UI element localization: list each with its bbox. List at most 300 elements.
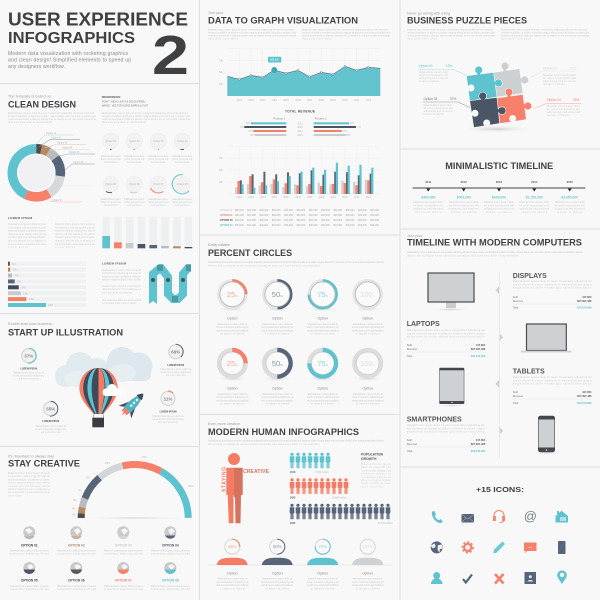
illustration: rocket bbox=[115, 387, 150, 422]
block: tablets: $27,097,486 bbox=[577, 394, 592, 398]
text block: data intro bbox=[208, 28, 391, 40]
percent circle labels row two: sed do eiusmod tempor incididunt bbox=[261, 398, 294, 402]
big numeral 2: 2 bbox=[152, 24, 189, 86]
block: tablets: 447,804 bbox=[582, 390, 592, 394]
illustration: hot air balloon bbox=[79, 368, 118, 427]
callout: option 03: 37% bbox=[450, 97, 457, 101]
timeline values: $700,000 bbox=[457, 196, 471, 200]
callout: option 02: Material lorem ipsum dolor bbox=[543, 73, 576, 77]
horizontal bar chart: 4% bbox=[15, 275, 19, 278]
resources list: FONT : NEXA LIGHT & BOLD (FREE) bbox=[102, 100, 145, 104]
block: tablets: $30,079,869 bbox=[577, 401, 592, 405]
block: tablets: sed do eiusmod tempor incididunt ut labore et dolore magna bbox=[513, 378, 592, 382]
block: laptops: Material lorem ipsum dolor sit amet, consectetur adipiscing elit bbox=[407, 328, 485, 332]
text block: lorem ipsum columns: Material lorem ipsum dolor sit amet bbox=[55, 222, 95, 226]
text block: data intro: nostrud exercitation ullamco laboris nisi ut aliquip ex ea commodo consequat bbox=[302, 34, 390, 38]
callout: option 03: adipiscing sed eiusmod bbox=[424, 109, 453, 113]
area chart: 25k bbox=[219, 83, 224, 86]
dome labels: Option bbox=[227, 572, 238, 576]
timeline spine with arrows bbox=[496, 272, 503, 458]
timeline descriptions: Material lorem ipsum dolor bbox=[484, 200, 514, 204]
text block: lorem ipsum columns: dolore magna aliqua enim minim bbox=[8, 232, 46, 236]
text block: data intro: duis aute irure dolor bbox=[302, 36, 332, 40]
percent circle labels row one: Material lorem ipsum dolor sit bbox=[308, 322, 338, 326]
area chart: 2008 bbox=[319, 99, 325, 102]
text block: lorem ipsum columns: dolore magna aliqua enim minim bbox=[55, 232, 95, 236]
option icons grid: consectetur adipiscing elit sed bbox=[151, 587, 190, 591]
text block: lorem ipsum with ribbon: duis aute irure dolor in reprehenderit bbox=[102, 298, 141, 302]
butterfly bar chart: total revenue bbox=[240, 110, 362, 137]
area chart: 2003 bbox=[260, 99, 266, 102]
percent stat 55%: LOREM IPSUM bbox=[42, 420, 59, 423]
percent stat 69%: 69% bbox=[171, 350, 180, 354]
percent circle labels row two: sed do eiusmod tempor incididunt bbox=[307, 398, 339, 402]
dome labels: Option bbox=[362, 572, 373, 576]
jigsaw puzzle graphic bbox=[459, 62, 535, 133]
text block: stay creative intro: irure dolor bbox=[8, 493, 22, 497]
percent stat 55% bbox=[35, 401, 67, 434]
percent circles row two: 100% bbox=[360, 359, 376, 368]
small percent circles grid: dolor sit amet elit bbox=[148, 157, 169, 161]
panel: stay creative: It's important to always stay bbox=[8, 454, 54, 458]
butterfly bar chart: total revenue: 71% bbox=[246, 122, 251, 125]
timeline values: $400,000 bbox=[421, 196, 435, 200]
text block: lorem ipsum with ribbon: ullamco laboris nisi ut aliquip ex bbox=[102, 287, 142, 291]
grouped column chart: 75k bbox=[219, 157, 224, 160]
option icons grid: OPTION 03 bbox=[115, 544, 132, 548]
semicircle arc chart: 1% bbox=[72, 514, 76, 516]
horizontal bar chart: 1% bbox=[12, 263, 16, 266]
small percent circles grid: dolor sit amet elit bbox=[148, 200, 169, 204]
panel: business puzzle pieces bbox=[407, 12, 590, 133]
text block: population growth: consectetur adipiscing bbox=[361, 468, 392, 472]
timeline descriptions: sit amet consectetur elit bbox=[555, 203, 585, 207]
percent circles row two: 75% bbox=[317, 359, 329, 368]
heading: start up illustration: START UP ILLUSTRATION bbox=[8, 328, 123, 338]
callout: option 03: Option 03 bbox=[424, 97, 438, 101]
dome labels: ut labore et dolore bbox=[311, 586, 335, 590]
small percent circles grid: Option 03 bbox=[153, 140, 164, 143]
option icons grid: OPTION 01 bbox=[21, 544, 38, 548]
text block: lorem ipsum columns: consectetur adipiscing elit sed do bbox=[8, 225, 47, 229]
text block: human intro bbox=[208, 438, 385, 446]
timeline values: $1,750,000 bbox=[526, 196, 543, 200]
timeline descriptions: tempor ut labore bbox=[557, 210, 583, 214]
callout: option 01: Material lorem ipsum dolor bbox=[419, 70, 448, 74]
grouped column chart: 2007 bbox=[307, 196, 313, 199]
small percent circles grid: Material lorem ipsum bbox=[148, 197, 168, 201]
device: tablet bbox=[436, 368, 468, 407]
percent circle labels row one: Material lorem ipsum dolor sit bbox=[217, 322, 248, 326]
text block: stay creative intro: dolore magna aliqua enim minim bbox=[8, 481, 50, 485]
block: displays: Material lorem ipsum dolor sit amet, consectetur adipiscing elit bbox=[513, 279, 592, 283]
panel: modern human infographics bbox=[208, 422, 393, 590]
percent stat 11%: amet consectetur adipiscing bbox=[152, 417, 184, 421]
percent circle labels row two: amet consectetur adipiscing elit bbox=[352, 395, 384, 399]
block: laptops: Total bbox=[407, 354, 413, 358]
semicircle arc chart: 15% bbox=[142, 456, 148, 459]
pictogram row 2010: 2010 bbox=[290, 471, 296, 474]
percent circle labels row two: sed do eiusmod tempor incididunt bbox=[216, 398, 249, 402]
butterfly bar chart: total revenue: 77% bbox=[240, 126, 245, 129]
percent stat 11%: LOREM IPSUM bbox=[160, 410, 176, 414]
panel: clean design: The template is based on bbox=[8, 94, 51, 98]
donut leader labels bbox=[33, 132, 95, 202]
text block: lorem ipsum columns bbox=[8, 216, 96, 249]
text block: computers intro bbox=[407, 250, 584, 257]
block: displays bbox=[513, 271, 592, 310]
text block: population growth: dolore magna aliqua bbox=[361, 478, 392, 482]
percent circle labels row two: Option bbox=[317, 386, 328, 390]
timeline descriptions: tempor ut labore bbox=[486, 210, 513, 214]
area chart: 2005 bbox=[283, 99, 289, 102]
butterfly bar chart: total revenue: Product 1 bbox=[273, 116, 286, 120]
option icons grid: Material lorem ipsum dolor sit amet bbox=[104, 584, 143, 588]
donut leader labels: Option 05 bbox=[69, 151, 80, 154]
block: displays: Sold bbox=[513, 295, 518, 299]
block: smartphones: sed do eiusmod tempor incididunt ut labore et dolore magna bbox=[407, 426, 485, 430]
text block: puzzle intro: duis aute irure dolor bbox=[501, 36, 531, 40]
text block: clean design intro: duis aute irure dolor in reprehenderit bbox=[102, 120, 146, 124]
percent circle labels row two: ut labore et dolore bbox=[311, 402, 335, 406]
percent circle labels row two: Material lorem ipsum dolor sit bbox=[308, 392, 338, 396]
percent circle labels row one: amet consectetur adipiscing elit bbox=[352, 325, 384, 329]
text block: clean design intro: tempor incididunt ut labore et dolore magna aliqua enim ad minim veniam quis bbox=[8, 114, 97, 118]
block: smartphones: 447,804 bbox=[476, 438, 486, 442]
area chart: 2010 bbox=[342, 99, 348, 102]
text block: lorem ipsum with ribbon: consectetur adipiscing elit sed do bbox=[102, 271, 142, 275]
option icons grid: OPTION 08 bbox=[162, 578, 179, 582]
small percent circles grid: Option 07 bbox=[153, 183, 164, 186]
text block: data intro: tempor incididunt ut labore et dolore magna aliqua enim ad minim veniam quis bbox=[208, 30, 297, 34]
panel: modern human infographics: Even more creative bbox=[208, 422, 240, 426]
text block: stay creative intro: veniam quis nostrud exercitation bbox=[8, 484, 51, 488]
percent circle labels row one: sed do eiusmod tempor incididunt bbox=[352, 328, 384, 332]
block: smartphones: $30,079,869 bbox=[471, 449, 486, 453]
dome labels: Material lorem ipsum dolor sit bbox=[308, 576, 338, 580]
percent circles row two: 50% bbox=[272, 359, 283, 368]
percent circle labels row one: ut labore et dolore bbox=[356, 332, 380, 336]
butterfly bar chart: total revenue: 71% bbox=[250, 134, 255, 137]
icon: house bbox=[556, 511, 568, 522]
text block: puzzle intro: Material lorem ipsum dolor sit amet, consectetur adipiscing elit sed do eiusmod bbox=[407, 28, 494, 32]
percent stat 69%: amet consectetur adipiscing bbox=[160, 370, 192, 374]
panel: start up illustration: Rocket start your business bbox=[8, 322, 52, 326]
small percent circles grid: consectetur bbox=[104, 160, 118, 164]
callout: option 02: tempor ut labore bbox=[543, 82, 566, 86]
heading: timeline with modern computers: TIMELINE WITH MODERN COMPUTERS bbox=[407, 238, 582, 248]
block: displays: aliqua enim ad minim veniam quis nostrud exercitation bbox=[513, 286, 592, 290]
block: laptops: Revenue bbox=[407, 347, 418, 351]
block: laptops: 447,804 bbox=[476, 343, 486, 347]
timeline descriptions: tempor ut labore bbox=[451, 210, 477, 214]
panel: timeline with modern computers bbox=[407, 234, 592, 458]
callout: option 01: tempor ut labore bbox=[419, 79, 440, 83]
option icons grid: Material lorem ipsum dolor sit amet bbox=[57, 584, 96, 588]
area chart: 2001 bbox=[237, 99, 243, 102]
percent circle labels row one: Material lorem ipsum dolor sit bbox=[262, 322, 293, 326]
device: laptop bbox=[521, 324, 572, 352]
timeline descriptions: adipiscing sed eiusmod bbox=[519, 207, 550, 211]
percent circle labels row one bbox=[216, 316, 384, 336]
small percent circles grid: Material lorem ipsum bbox=[124, 197, 144, 201]
panel: main header bbox=[8, 8, 189, 86]
block: smartphones: SMARTPHONES bbox=[407, 414, 462, 424]
small percent circles grid bbox=[101, 133, 193, 207]
small percent circles grid: consectetur bbox=[151, 203, 165, 207]
text block: population growth bbox=[361, 452, 392, 488]
text block: data intro: Material lorem ipsum dolor sit amet, consectetur adipiscing elit sed do eiusmod bbox=[302, 28, 389, 32]
percent circle labels row two bbox=[216, 386, 384, 406]
donut leader labels: Option 02 bbox=[51, 136, 62, 140]
butterfly bar chart: total revenue: 47% bbox=[343, 130, 348, 133]
text block: puzzle intro: Material lorem ipsum dolor sit amet, consectetur adipiscing elit sed do eiusmod bbox=[501, 28, 588, 32]
percent stat 11%: elit sed eiusmod bbox=[158, 420, 179, 424]
dome labels: ut labore et dolore bbox=[220, 586, 245, 590]
percent circle labels row one: sed do eiusmod tempor incididunt bbox=[216, 328, 249, 332]
percent circle labels row one: ut labore et dolore bbox=[265, 332, 290, 336]
text block: population growth: incididunt labore et bbox=[361, 475, 391, 479]
butterfly bar chart: total revenue: 71% bbox=[350, 122, 355, 125]
percent circle labels row one: Option bbox=[317, 316, 328, 320]
callout: option 01: 13% bbox=[446, 64, 453, 68]
text block: clean design intro: tempor incididunt ut labore et dolore magna aliqua enim ad minim veniam quis bbox=[102, 114, 191, 118]
panel: timeline with modern computers: Just your bbox=[407, 234, 423, 238]
percent stat 11%: 11% bbox=[164, 396, 172, 401]
timeline descriptions: sit amet consectetur elit bbox=[449, 203, 479, 207]
text block: lorem ipsum columns: veniam quis nostrud exercitation bbox=[8, 235, 47, 239]
timeline axis: 2012 bbox=[461, 180, 467, 184]
horizontal bar chart: 7% bbox=[17, 280, 21, 284]
text block: computers intro: Material lorem ipsum dolor sit amet, consectetur adipiscing elit sed do eiusmod tempor incididunt ut labore et dolore magna aliqua enim ad minim veniam quis nostrud exercitation ullamco bbox=[407, 250, 584, 254]
block: laptops: sed do eiusmod tempor incididunt ut labore et dolore magna bbox=[407, 331, 485, 335]
percent circle labels row two: amet consectetur adipiscing elit bbox=[307, 395, 339, 399]
block: displays: Total bbox=[513, 306, 519, 310]
heading: business puzzle pieces: BUSINESS PUZZLE PIECES bbox=[407, 16, 527, 26]
timeline values: $3,050,000 bbox=[561, 196, 578, 200]
option icons grid: Material lorem ipsum dolor sit amet bbox=[57, 548, 96, 552]
percent circle labels row one: sed do eiusmod tempor incididunt bbox=[307, 328, 339, 332]
option icons grid: consectetur adipiscing elit sed bbox=[151, 552, 190, 556]
percent circle labels row two: ut labore et dolore bbox=[356, 402, 380, 406]
percent circle labels row one: Material lorem ipsum dolor sit bbox=[353, 322, 383, 326]
dome labels: Material lorem ipsum dolor sit bbox=[262, 576, 293, 580]
percent circle labels row two: Option bbox=[362, 386, 373, 390]
text block: lorem ipsum with ribbon: veniam quis nostrud exercitation bbox=[102, 284, 142, 288]
percent circle labels row two: Option bbox=[272, 386, 283, 390]
small percent circles grid: Option 01 bbox=[106, 140, 117, 143]
grouped column chart: 2008 bbox=[319, 196, 325, 199]
semicircle arc chart: 7% bbox=[78, 490, 82, 492]
block: smartphones bbox=[407, 414, 486, 453]
text block: population growth: Material lorem ipsum bbox=[361, 462, 391, 466]
data table: OPTION 03 bbox=[220, 219, 233, 222]
heading: minimalistic timeline: MINIMALISTIC TIMELINE bbox=[445, 161, 553, 172]
callout: option 03: tempor ut labore bbox=[424, 112, 444, 116]
small percent circles grid: Material lorem ipsum bbox=[101, 154, 121, 158]
callout: option 03: sit amet consectetur elit bbox=[424, 106, 453, 110]
text block: puzzle intro: nostrud exercitation ullamco laboris nisi ut aliquip ex ea commodo consequat bbox=[501, 34, 589, 38]
resources list bbox=[102, 95, 149, 108]
text block: stay creative intro bbox=[8, 471, 51, 497]
heading: data to graph visualization: DATA TO GRAPH VISUALIZATION bbox=[208, 16, 358, 26]
option icons grid: OPTION 07 bbox=[115, 578, 132, 582]
timeline descriptions: sit amet consectetur elit bbox=[413, 203, 444, 207]
callout: option 04 bbox=[533, 98, 581, 117]
heading: clean design: CLEAN DESIGN bbox=[8, 100, 76, 110]
panel: icons bbox=[431, 485, 568, 584]
area chart: 2011 bbox=[354, 99, 360, 102]
option icons grid: Material lorem ipsum dolor sit amet bbox=[151, 584, 190, 588]
text block: lorem ipsum columns: veniam quis nostrud exercitation bbox=[55, 235, 96, 239]
ribbon graphic bbox=[149, 265, 191, 304]
text block: population growth: enim minim veniam bbox=[361, 481, 391, 485]
percent stat 37%: 37% bbox=[24, 354, 33, 358]
percent stat 11% bbox=[152, 391, 184, 424]
block: laptops: LAPTOPS bbox=[407, 319, 440, 328]
small percent circles grid: Option 05 bbox=[106, 183, 117, 186]
text block: clean design intro: nostrud exercitation ullamco laboris nisi ut aliquip ex ea commodo consequat bbox=[8, 117, 96, 121]
dome labels: sed do eiusmod tempor incididunt bbox=[352, 583, 384, 587]
block: laptops bbox=[407, 319, 486, 358]
human figure staying creative bbox=[222, 453, 270, 523]
header description: Modern data visualization with rocketing graphics bbox=[8, 51, 128, 57]
text block: stay creative intro: consectetur adipiscing elit sed do bbox=[8, 474, 51, 478]
text block: data intro: tempor incididunt ut labore et dolore magna aliqua enim ad minim veniam quis bbox=[302, 30, 391, 34]
text block: stay creative intro: Material lorem ipsum dolor sit amet bbox=[8, 471, 50, 475]
block: smartphones: Total bbox=[407, 449, 413, 453]
dome labels: amet consectetur adipiscing elit bbox=[261, 580, 294, 584]
block: laptops: $30,079,869 bbox=[471, 354, 486, 358]
block: smartphones: aliqua enim ad minim veniam quis nostrud exercitation bbox=[407, 430, 485, 434]
timeline axis: 2013 bbox=[496, 180, 503, 184]
percent stat 69%: elit sed eiusmod bbox=[166, 373, 186, 377]
panel: business puzzle pieces: Never go wrong with using bbox=[407, 12, 450, 16]
pictogram row 2030: 2030 bbox=[290, 522, 296, 525]
callout: option 04: tempor ut labore bbox=[547, 113, 570, 117]
text block: lorem ipsum columns: LOREM IPSUM bbox=[8, 216, 32, 220]
text block: lorem ipsum columns: ullamco laboris nisi ut aliquip ex bbox=[8, 238, 47, 242]
icon: contact card bbox=[524, 572, 536, 584]
area chart: $00,000 bbox=[270, 58, 280, 62]
percent stat 37%: LOREM IPSUM bbox=[20, 368, 37, 370]
dome percent circles: 50% bbox=[273, 544, 282, 549]
percent circle labels row one: Option bbox=[272, 316, 283, 320]
pictogram row 2030: 17,000 million bbox=[378, 522, 393, 525]
horizontal bar chart bbox=[8, 262, 86, 307]
pictogram row 2020: 10,000 million bbox=[332, 496, 347, 500]
text block: population growth: eiusmod tempor ut bbox=[361, 472, 391, 476]
text block: percent intro: laboris nisi ut aliquip ex ea commodo consequat duis aute irure dolor in reprehenderit bbox=[208, 263, 320, 267]
text block: clean design intro: nostrud exercitation ullamco laboris nisi ut aliquip ex ea commodo consequat bbox=[102, 117, 190, 121]
text block: data intro: nostrud exercitation ullamco laboris nisi ut aliquip ex ea commodo consequat bbox=[208, 34, 296, 38]
grouped column chart: 2006 bbox=[295, 196, 301, 199]
area chart: 2007 bbox=[307, 99, 313, 102]
panel: data to graph visualization bbox=[208, 11, 391, 227]
text block: clean design intro: Material lorem ipsum dolor sit amet, consectetur adipiscing elit sed do eiusmod bbox=[8, 111, 95, 115]
text block: lorem ipsum columns: Material lorem ipsum dolor sit amet bbox=[8, 222, 46, 226]
panel: percent circles: Easily editable bbox=[208, 243, 230, 247]
text block: human intro: Material lorem ipsum dolor sit amet, consectetur adipiscing elit sed do eiusmod tempor incididunt ut labore et dolore magna aliqua enim ad minim veniam quis nostrud exercitation ullamco bbox=[208, 438, 385, 442]
percent circle labels row two: Option bbox=[227, 386, 238, 390]
area chart: 50k bbox=[219, 71, 224, 74]
timeline descriptions bbox=[413, 200, 585, 214]
header description bbox=[8, 51, 131, 70]
grouped column chart: 2004 bbox=[272, 196, 278, 199]
small percent circles grid: consectetur bbox=[104, 203, 118, 207]
callout: option 04: sit amet consectetur elit bbox=[547, 107, 580, 111]
heading: stay creative: STAY CREATIVE bbox=[8, 458, 80, 470]
callout: option 01: adipiscing sed eiusmod bbox=[419, 76, 449, 80]
butterfly bar chart: total revenue: 2014 bbox=[297, 130, 303, 133]
percent circle labels row one: amet consectetur adipiscing elit bbox=[307, 325, 339, 329]
text block: lorem ipsum with ribbon bbox=[102, 262, 142, 305]
block: tablets: Sold bbox=[513, 390, 518, 394]
grouped column chart: 2005 bbox=[283, 196, 289, 199]
dome labels: Option bbox=[272, 572, 283, 576]
callout: option 02: 37% bbox=[570, 66, 577, 70]
percent circle labels row one: amet consectetur adipiscing elit bbox=[261, 325, 294, 329]
dome labels: sed do eiusmod tempor incididunt bbox=[216, 583, 249, 587]
text block: puzzle intro: tempor incididunt ut labore et dolore magna aliqua enim ad minim veniam quis bbox=[501, 30, 590, 34]
percent circle labels row two: ut labore et dolore bbox=[265, 402, 290, 406]
text block: lorem ipsum with ribbon: dolore magna aliqua enim minim bbox=[102, 278, 141, 282]
heading: percent circles: PERCENT CIRCLES bbox=[208, 248, 292, 259]
block: displays: $30,079,869 bbox=[577, 306, 592, 310]
block: smartphones: Sold bbox=[407, 438, 412, 442]
text block: data intro: duis aute irure dolor bbox=[208, 36, 238, 40]
horizontal bar chart: 13% bbox=[23, 292, 29, 295]
text block: lorem ipsum columns: irure dolor bbox=[55, 245, 75, 249]
butterfly bar chart: total revenue: Product 2 bbox=[315, 116, 327, 120]
percent circles row one: 75% bbox=[317, 290, 329, 299]
area chart: 2012 bbox=[366, 99, 372, 102]
butterfly bar chart: total revenue: 71% bbox=[346, 134, 351, 137]
butterfly bar chart: total revenue: TOTAL REVENUE bbox=[285, 110, 315, 114]
callout: option 04: 33% bbox=[573, 98, 580, 102]
small percent circles grid: Option 02 bbox=[129, 140, 140, 143]
text block: human intro: laboris nisi ut aliquip ex ea commodo consequat duis aute irure dolor in reprehenderit bbox=[208, 442, 320, 446]
icon: pencil bbox=[494, 542, 505, 554]
percent circle labels row two: Material lorem ipsum dolor sit bbox=[353, 392, 383, 396]
option icons grid: consectetur adipiscing elit sed bbox=[104, 587, 143, 591]
callout: option 01: sit amet consectetur elit bbox=[419, 73, 448, 77]
semicircle arc chart: 8% bbox=[86, 476, 90, 480]
timeline descriptions: adipiscing sed eiusmod bbox=[449, 207, 479, 211]
grouped column chart: 2011 bbox=[354, 196, 360, 199]
horizontal bar chart: 2% bbox=[13, 269, 17, 272]
dome labels: ut labore et dolore bbox=[265, 586, 290, 590]
percent stat 37%: amet consectetur adipiscing bbox=[13, 374, 45, 378]
text block: stay creative intro: ea commodo consequat duis aute bbox=[8, 490, 51, 494]
callout: option 02 bbox=[530, 66, 577, 86]
timeline descriptions: tempor ut labore bbox=[521, 210, 548, 214]
percent circle labels row one: amet consectetur adipiscing elit bbox=[216, 325, 249, 329]
callout: option 01 bbox=[418, 64, 466, 83]
data table: $00,000 $00,000 $00,000 $00,000 $00,000 $00,000 $00,000 $00,000 $00,000 $00,000 $00,000 $00,000 bbox=[235, 209, 380, 212]
icon: speech bubble: text bbox=[529, 546, 532, 549]
small percent circles grid: dolor sit amet elit bbox=[172, 200, 193, 204]
grouped column chart: 25k bbox=[219, 181, 224, 184]
option icons grid: consectetur adipiscing elit sed bbox=[57, 552, 96, 556]
callout: option 01: Option 01 bbox=[419, 64, 433, 68]
text block: clean design intro: Material lorem ipsum dolor sit amet, consectetur adipiscing elit sed do eiusmod bbox=[102, 111, 189, 115]
small percent circles grid: consectetur bbox=[175, 203, 189, 207]
dome labels bbox=[216, 572, 384, 590]
callout: option 04: Material lorem ipsum dolor bbox=[547, 104, 580, 108]
percent circle labels row one: ut labore et dolore bbox=[220, 332, 245, 336]
block: smartphones: Material lorem ipsum dolor sit amet, consectetur adipiscing elit bbox=[407, 423, 485, 427]
